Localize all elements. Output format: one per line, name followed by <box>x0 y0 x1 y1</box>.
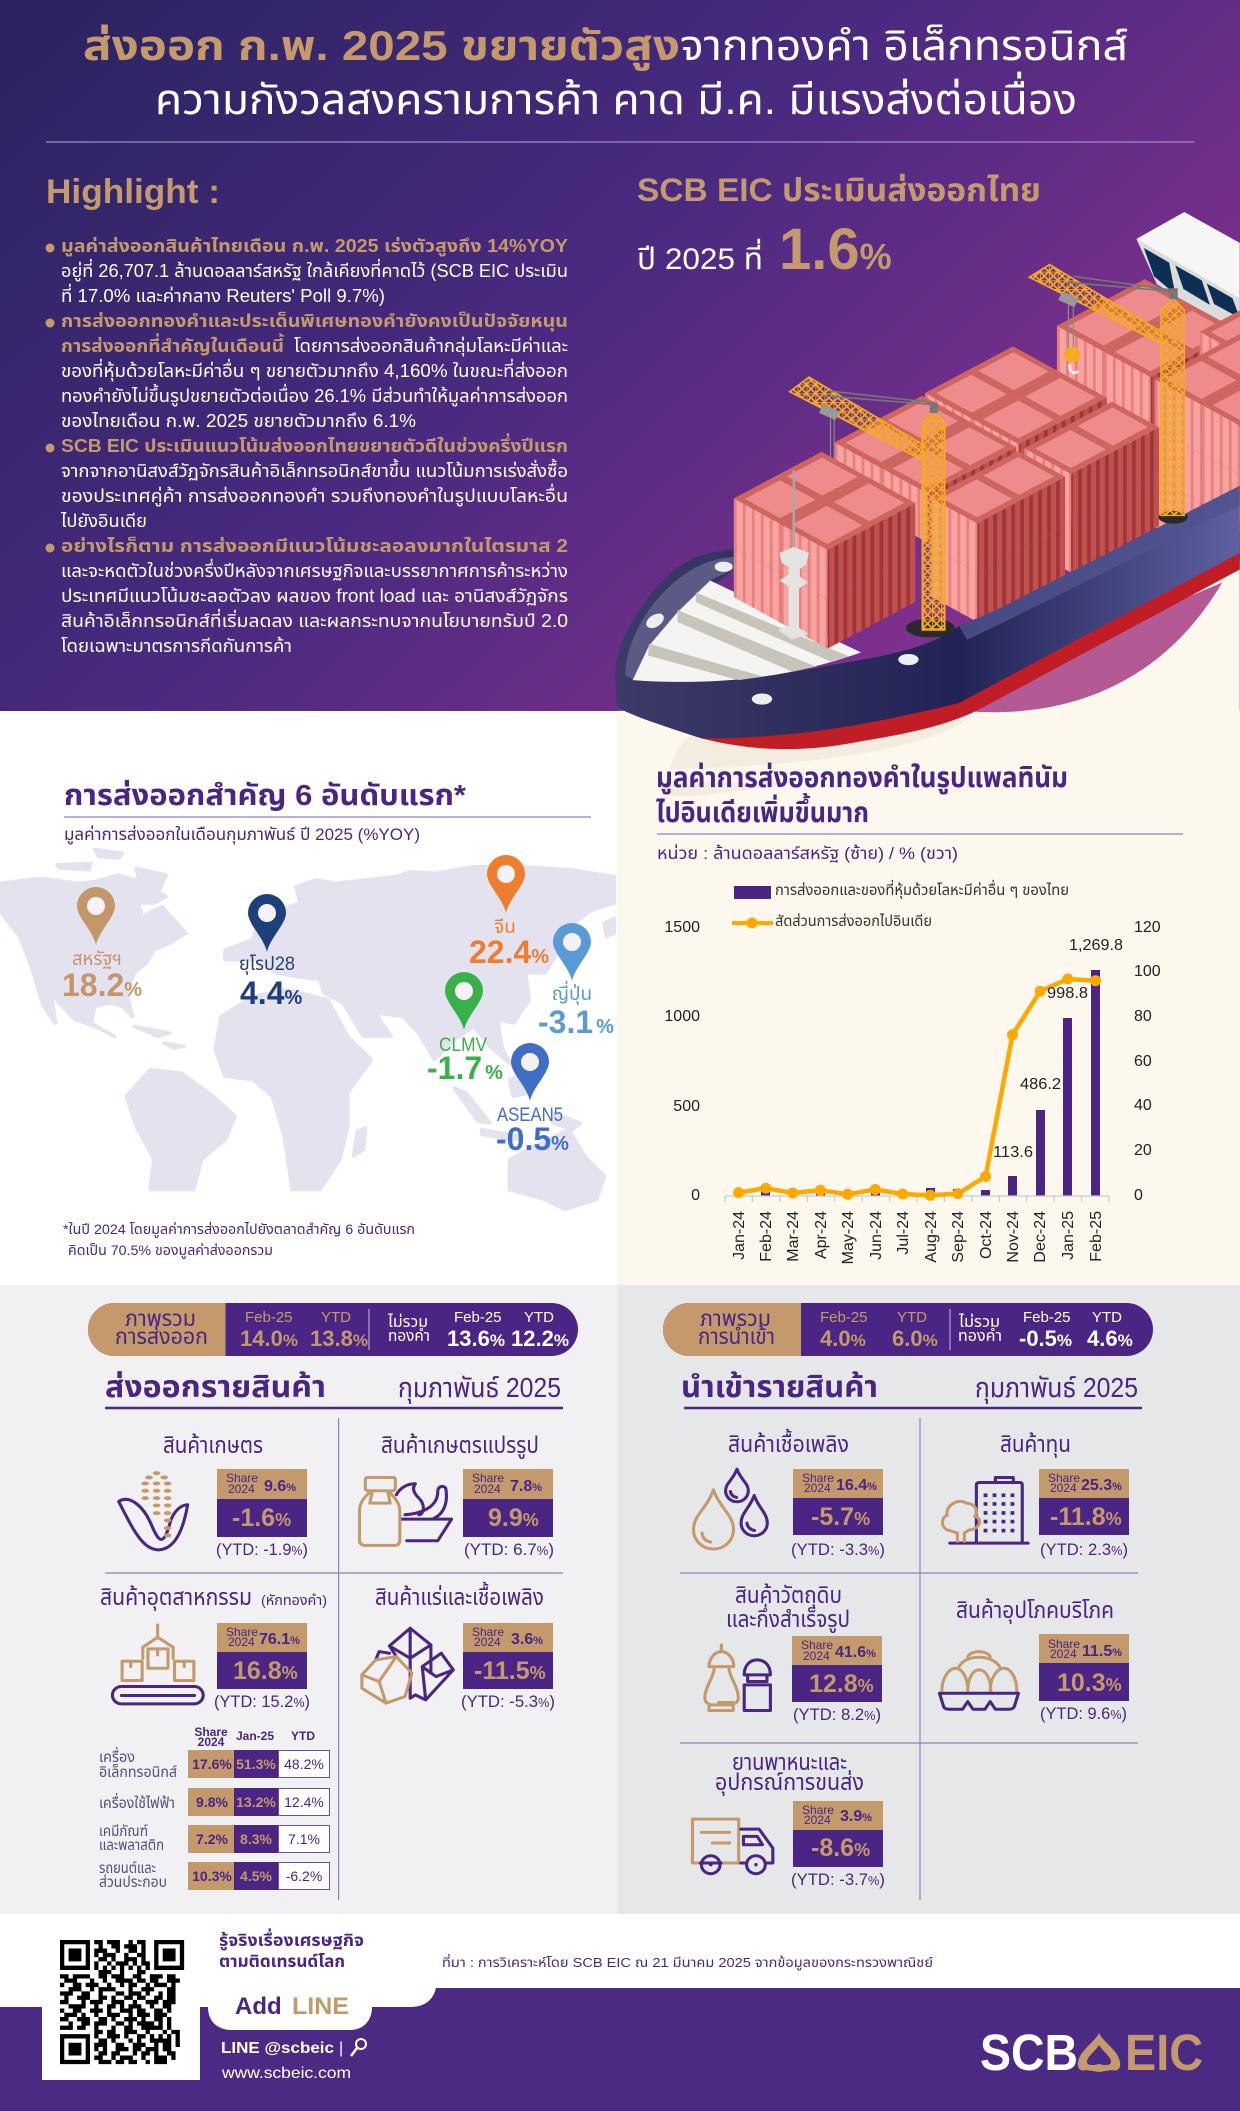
card: raw materials: Share <box>801 1638 833 1652</box>
footer band <box>0 1988 1240 2111</box>
card: vehicles and transport equipment: อุปกรณ์การขนส่ง <box>715 1769 864 1796</box>
x axis labels: Jul-24 <box>895 1211 912 1255</box>
pin: Japan: ญี่ปุ่น <box>552 980 592 1005</box>
chart legend <box>732 879 1069 930</box>
card: processed agricultural goods: 2024 <box>474 1482 501 1496</box>
import summary pill: Feb-25 <box>820 1309 868 1326</box>
export summary pill: YTD <box>524 1309 554 1326</box>
right axis: 0 <box>1134 1187 1143 1204</box>
export summary pill: การส่งออก <box>115 1324 208 1349</box>
import summary pill <box>663 1303 1153 1356</box>
export section heading: กุมภาพันธ์ 2025 <box>398 1372 561 1404</box>
table: industrial breakdown: Jan-25 <box>236 1729 274 1743</box>
table: industrial breakdown: Share <box>194 1725 228 1739</box>
left axis: 500 <box>673 1098 700 1115</box>
footer tagline: ตามติดเทรนด์โลก <box>219 1952 345 1971</box>
pin: CLMV <box>427 972 503 1086</box>
bullet 3: จากจากอานิสงส์วัฏจักรสินค้าอิเล็กทรอนิกส์ขาขึ้น แนวโน้มการเร่งสั่งซื้อ <box>61 458 568 481</box>
bullet 4: ประเทศมีแนวโน้มชะลอตัวลง ผลของ front load และ อานิสงส์วัฏจักร <box>61 586 568 606</box>
card: minerals and fuel: (YTD: -5.3%) <box>461 1692 555 1711</box>
chart heading: ไปอินเดียเพิ่มขึ้นมาก <box>656 792 869 828</box>
bullet 2: ของไทยเดือน ก.พ. 2025 ขยายตัวมากถึง 6.1% <box>61 411 416 431</box>
card: industrial goods: 16.8% <box>233 1657 298 1685</box>
bullet 3 <box>46 433 568 531</box>
export summary pill: 13.6% <box>447 1326 505 1351</box>
card: capital goods: สินค้าทุน <box>1000 1431 1071 1458</box>
map footnote <box>63 1221 415 1259</box>
import summary pill: 4.6% <box>1087 1326 1133 1351</box>
export summary pill: 12.2% <box>511 1326 569 1351</box>
icon: truck <box>692 1819 773 1874</box>
source note: ที่มา : การวิเคราะห์โดย SCB EIC ณ 21 มีนาคม 2025 จากข้อมูลของกระทรวงพาณิชย์ <box>442 1953 933 1970</box>
card: processed agricultural goods: (YTD: 6.7%) <box>464 1540 554 1559</box>
table: industrial breakdown: 13.2% <box>236 1794 276 1810</box>
card: vehicles and transport equipment <box>692 1749 885 1889</box>
icon: corn <box>119 1471 188 1550</box>
import summary pill: การนำเข้า <box>698 1324 775 1349</box>
export summary pill: ไม่รวม <box>387 1313 428 1331</box>
bullet 2: การส่งออกที่สำคัญในเดือนนี้ <box>61 333 285 356</box>
forecast callout: 1.6% <box>779 217 892 282</box>
card: capital goods <box>942 1431 1129 1559</box>
card: vehicles and transport equipment: 3.9% <box>840 1808 872 1825</box>
left axis: 1500 <box>664 919 700 936</box>
card: raw materials: 12.8% <box>809 1670 874 1698</box>
import summary pill: ไม่รวม <box>958 1313 1000 1331</box>
card: vehicles and transport equipment: 2024 <box>804 1813 831 1827</box>
contact links: LINE @scbeic <box>221 2040 334 2057</box>
pin: Europe: ยุโรป28 <box>239 954 295 975</box>
chart heading <box>656 762 1183 863</box>
export summary pill: Feb-25 <box>245 1309 293 1326</box>
bullet 2: ของที่หุ้มด้วยโลหะมีค่าอื่น ๆ ขยายตัวมากถึง 4,160% ในขณะที่ส่งออก <box>61 358 568 382</box>
table: industrial breakdown: YTD <box>291 1729 315 1743</box>
card: vehicles and transport equipment: -8.6% <box>811 1834 870 1862</box>
right axis <box>1134 919 1161 1204</box>
bullet 4 <box>46 536 568 656</box>
card: raw materials: (YTD: 8.2%) <box>793 1705 881 1724</box>
bullet 1: ที่ 17.0% และค่ากลาง Reuters' Poll 9.7%) <box>61 283 385 306</box>
add line button: LINE <box>292 1993 349 2020</box>
import summary pill: 6.0% <box>892 1326 938 1351</box>
bullet 3: ของประเทศคู่ค้า การส่งออกทองคำ รวมถึงทองคำในรูปแบบโลหะอื่น <box>61 483 568 508</box>
card: industrial goods: 2024 <box>228 1635 255 1649</box>
import summary pill: -0.5% <box>1019 1326 1072 1351</box>
forecast callout: ปี 2025 ที่ <box>637 238 763 276</box>
table: industrial breakdown: เครื่อง <box>99 1746 135 1766</box>
card: industrial goods: Share <box>226 1625 258 1639</box>
chart heading: มูลค่าการส่งออกทองคำในรูปแพลทินัม <box>656 762 1068 795</box>
x axis labels: May-24 <box>840 1211 857 1264</box>
card: minerals and fuel: Share <box>472 1625 504 1639</box>
table: industrial breakdown <box>99 1725 330 1891</box>
x axis labels <box>731 1211 1105 1264</box>
card: raw materials: 2024 <box>803 1649 830 1663</box>
export summary pill: ทองคำ <box>388 1328 430 1345</box>
card: consumer goods: 10.3% <box>1057 1669 1122 1697</box>
export summary pill: YTD <box>321 1309 351 1326</box>
card: fuel: Share <box>802 1471 834 1485</box>
contact links <box>221 2039 366 2082</box>
title <box>83 22 1128 123</box>
section backgrounds <box>0 711 1240 2111</box>
map heading: มูลค่าการส่งออกในเดือนกุมภาพันธ์ ปี 2025 (%YOY) <box>64 825 420 846</box>
table: industrial breakdown: 9.8% <box>196 1794 229 1810</box>
bar value labels <box>993 937 1123 1161</box>
card: agricultural goods: 9.6% <box>264 1478 296 1495</box>
import summary pill: ภาพรวม <box>700 1306 771 1331</box>
card: industrial goods: (YTD: 15.2%) <box>214 1692 310 1711</box>
card: industrial goods: สินค้าอุตสาหกรรม <box>100 1584 252 1611</box>
highlight panel <box>46 173 568 656</box>
card: minerals and fuel: สินค้าแร่และเชื้อเพลิง <box>375 1581 544 1610</box>
card: fuel <box>693 1428 885 1559</box>
pin: China <box>469 855 549 970</box>
table: industrial breakdown: 51.3% <box>236 1756 276 1772</box>
export summary pill: 13.8% <box>310 1326 368 1351</box>
map footnote: คิดเป็น 70.5% ของมูลค่าส่งออกรวม <box>68 1242 273 1259</box>
card: industrial goods <box>99 1584 330 1891</box>
export summary pill: Feb-25 <box>454 1309 502 1326</box>
title: ส่งออก ก.พ. 2025 ขยายตัวสูง <box>83 22 680 71</box>
card: agricultural goods <box>119 1432 308 1559</box>
bullet 4: อย่างไรก็ตาม การส่งออกมีแนวโน้มชะลอลงมากในไตรมาส 2 <box>61 536 568 556</box>
bar value labels: 486.2 <box>1020 1076 1061 1093</box>
icon: building and tree <box>942 1477 1028 1543</box>
table: industrial breakdown: และพลาสติก <box>99 1837 164 1854</box>
x axis labels: Oct-24 <box>978 1211 995 1259</box>
card: consumer goods: 2024 <box>1050 1647 1077 1661</box>
card: processed agricultural goods <box>359 1432 554 1559</box>
card: capital goods: -11.8% <box>1050 1503 1122 1531</box>
pin: USA: 18.2% <box>62 967 142 1003</box>
import summary pill: YTD <box>1092 1309 1122 1326</box>
card: raw materials: 41.6% <box>835 1644 876 1661</box>
table: industrial breakdown: เคมีภัณฑ์ <box>99 1823 148 1840</box>
icon: crystals <box>362 1628 453 1703</box>
pin: Europe <box>239 894 302 1011</box>
table: industrial breakdown: 2024 <box>198 1735 225 1749</box>
export summary pill: 14.0% <box>240 1326 298 1351</box>
logo: SCB EIC: EIC <box>1125 2024 1203 2081</box>
bullet 1: อยู่ที่ 26,707.1 ล้านดอลลาร์สหรัฐ ใกล้เคียงที่คาดไว้ (SCB EIC ประเมิน <box>61 258 568 283</box>
pin: USA <box>62 887 142 1003</box>
bullet 1 <box>46 236 568 306</box>
card: capital goods: 25.3% <box>1081 1477 1122 1494</box>
export section heading: ส่งออกรายสินค้า <box>105 1371 326 1404</box>
pin: China: 22.4% <box>469 934 549 970</box>
card: agricultural goods: -1.6% <box>232 1504 291 1532</box>
card: minerals and fuel: 2024 <box>474 1635 501 1649</box>
table: industrial breakdown: 4.5% <box>240 1868 273 1884</box>
card: minerals and fuel <box>362 1581 555 1711</box>
bullet 4: และจะหดตัวในช่วงครึ่งปีหลังจากเศรษฐกิจและบรรยากาศการค้าระหว่าง <box>61 558 568 581</box>
contact links: | <box>339 2040 343 2057</box>
logo: SCB EIC: SCB <box>980 2024 1078 2081</box>
x axis labels: Mar-24 <box>785 1211 802 1262</box>
card: processed agricultural goods: 9.9% <box>488 1504 539 1532</box>
card: capital goods: 2024 <box>1050 1481 1077 1495</box>
export summary pill: ภาพรวม <box>125 1306 196 1331</box>
left axis <box>664 919 700 1204</box>
table: industrial breakdown: 8.3% <box>240 1831 273 1847</box>
bullet 2: โดยการส่งออกสินค้ากลุ่มโลหะมีค่าและ <box>294 336 568 357</box>
x axis labels: Feb-25 <box>1088 1211 1105 1262</box>
card: processed agricultural goods: 7.8% <box>510 1478 542 1495</box>
map heading <box>64 780 591 846</box>
card: minerals and fuel: -11.5% <box>474 1657 546 1685</box>
x axis labels: Jan-24 <box>731 1211 748 1260</box>
import summary pill: Feb-25 <box>1023 1309 1071 1326</box>
import section heading <box>681 1371 1142 1408</box>
contact links: www.scbeic.com <box>221 2065 351 2082</box>
footer tagline: รู้จริงเรื่องเศรษฐกิจ <box>219 1928 364 1951</box>
card: raw materials: สินค้าวัตถุดิบ <box>735 1582 842 1609</box>
bullet 1: มูลค่าส่งออกสินค้าไทยเดือน ก.พ. 2025 เร่งตัวสูงถึง 14%YOY <box>61 236 568 257</box>
forecast callout <box>637 172 1041 282</box>
footer tagline <box>219 1928 364 1971</box>
card: consumer goods: Share <box>1048 1637 1080 1651</box>
pin: CLMV: -1.7% <box>427 1050 503 1086</box>
table: industrial breakdown: 12.4% <box>284 1794 324 1810</box>
table: industrial breakdown: 17.6% <box>192 1756 232 1772</box>
pin: ASEAN5 <box>496 1043 569 1157</box>
add line button: Add <box>235 1993 282 2020</box>
bullet 2 <box>46 311 568 431</box>
icon: bottle and fruit bowl <box>359 1477 452 1545</box>
card: consumer goods: 11.5% <box>1082 1643 1122 1660</box>
table: industrial breakdown: รถยนต์และ <box>99 1860 156 1877</box>
x axis labels: Dec-24 <box>1032 1211 1049 1263</box>
table: industrial breakdown: -6.2% <box>286 1868 322 1884</box>
bullet 3: SCB EIC ประเมินแนวโน้มส่งออกไทยขยายตัวดีในช่วงครึ่งปีแรก <box>61 433 568 456</box>
bar value labels: 1,269.8 <box>1069 937 1123 954</box>
import summary pill: ทองคำ <box>958 1328 1002 1345</box>
chart legend: สัดส่วนการส่งออกไปอินเดีย <box>775 912 932 930</box>
bullet 2: การส่งออกทองคำและประเด็นพิเศษทองคำยังคงเป็นปัจจัยหนุน <box>61 311 568 332</box>
x axis labels: Jan-25 <box>1060 1211 1077 1260</box>
card: processed agricultural goods: สินค้าเกษตรแปรรูป <box>381 1432 539 1460</box>
pin: Japan <box>538 923 614 1040</box>
right axis: 120 <box>1134 919 1161 936</box>
export summary pill <box>88 1303 578 1356</box>
card: industrial goods: 76.1% <box>259 1631 300 1648</box>
chart: gold exports to India <box>664 879 1161 1264</box>
right axis: 40 <box>1134 1097 1152 1114</box>
highlight heading: Highlight : <box>46 173 220 211</box>
x axis labels: Feb-24 <box>758 1211 775 1262</box>
right axis: 100 <box>1134 963 1161 980</box>
icon: egg tray <box>939 1652 1018 1709</box>
card: vehicles and transport equipment: ยานพาหนะและ <box>732 1749 847 1775</box>
card: minerals and fuel: 3.6% <box>511 1631 543 1648</box>
left axis: 0 <box>691 1187 700 1204</box>
x axis labels: Sep-24 <box>950 1211 967 1263</box>
table: industrial breakdown: 7.1% <box>288 1831 320 1847</box>
import summary pill: 4.0% <box>820 1326 866 1351</box>
pin: CLMV: CLMV <box>439 1035 487 1056</box>
card: fuel: สินค้าเชื้อเพลิง <box>728 1428 849 1457</box>
table: industrial breakdown: 48.2% <box>284 1756 324 1772</box>
bars <box>761 970 1100 1196</box>
x axis labels: Jun-24 <box>868 1211 885 1260</box>
x axis labels: Nov-24 <box>1005 1211 1022 1263</box>
title: ความกังวลสงครามการค้า คาด มี.ค. มีแรงส่งต่อเนื่อง <box>155 71 1077 123</box>
right axis: 60 <box>1134 1053 1152 1070</box>
bar value labels: 113.6 <box>993 1144 1033 1161</box>
card: raw materials: และกึ่งสำเร็จรูป <box>726 1603 850 1634</box>
right axis: 20 <box>1134 1142 1152 1159</box>
pin: Japan: -3.1% <box>538 1004 614 1040</box>
import section heading: นำเข้ารายสินค้า <box>681 1371 878 1404</box>
card: raw materials <box>705 1582 882 1724</box>
card: agricultural goods: Share <box>226 1471 258 1485</box>
card: fuel: (YTD: -3.3%) <box>791 1540 885 1559</box>
pin: China: จีน <box>494 917 516 938</box>
logo: SCB EIC <box>980 2024 1203 2081</box>
card: vehicles and transport equipment: (YTD: -3.7%) <box>791 1870 885 1889</box>
world map <box>0 849 614 1210</box>
bullet 4: สินค้าอิเล็กทรอนิกส์ที่เริ่มลดลง และผลกระทบจากนโยบายทรัมป์ 2.0 <box>61 608 568 631</box>
left axis: 1000 <box>664 1008 700 1025</box>
right axis: 80 <box>1134 1008 1152 1025</box>
bullet 2: ทองคำยังไม่ขึ้นรูปขยายตัวต่อเนื่อง 26.1% มีส่วนทำให้มูลค่าการส่งออก <box>61 383 568 408</box>
export section heading <box>105 1371 563 1408</box>
card: consumer goods: สินค้าอุปโภคบริโภค <box>956 1597 1114 1624</box>
card: fuel: 2024 <box>804 1481 831 1495</box>
chart heading: หน่วย : ล้านดอลลาร์สหรัฐ (ซ้าย) / % (ขวา) <box>657 843 958 863</box>
card: industrial goods: (หักทองคำ) <box>261 1592 327 1608</box>
QR code <box>60 1940 184 2064</box>
header background <box>0 0 1240 712</box>
icon: conveyor and boxes <box>112 1625 203 1704</box>
table: industrial breakdown: เครื่องใช้ไฟฟ้า <box>99 1792 175 1812</box>
import section heading: กุมภาพันธ์ 2025 <box>975 1372 1138 1404</box>
title: จากทองคำ อิเล็กทรอนิกส์ <box>680 22 1128 69</box>
pin: ASEAN5: -0.5% <box>496 1121 569 1157</box>
line series <box>733 974 1101 1201</box>
card: fuel: -5.7% <box>811 1503 870 1531</box>
card: processed agricultural goods: Share <box>472 1471 504 1485</box>
icon: shakers <box>705 1645 770 1711</box>
illustration: container ship <box>616 212 1240 782</box>
card: agricultural goods: สินค้าเกษตร <box>163 1432 263 1458</box>
card: capital goods: Share <box>1048 1471 1080 1485</box>
map heading: การส่งออกสำคัญ 6 อันดับแรก* <box>64 780 467 812</box>
card: agricultural goods: 2024 <box>228 1482 255 1496</box>
card: agricultural goods: (YTD: -1.9%) <box>216 1540 308 1559</box>
pin: USA: สหรัฐฯ <box>72 949 122 970</box>
add line button <box>235 1993 349 2020</box>
card: consumer goods: (YTD: 9.6%) <box>1040 1704 1127 1723</box>
card: vehicles and transport equipment: Share <box>802 1803 834 1817</box>
card: fuel: 16.4% <box>836 1477 877 1494</box>
table: industrial breakdown: อิเล็กทรอนิกส์ <box>99 1763 177 1781</box>
forecast callout: SCB EIC ประเมินส่งออกไทย <box>637 172 1041 208</box>
table: industrial breakdown: ส่วนประกอบ <box>99 1873 167 1891</box>
pin: ASEAN5: ASEAN5 <box>497 1105 563 1126</box>
bullet 3: ไปยังอินเดีย <box>60 511 147 531</box>
card: capital goods: (YTD: 2.3%) <box>1040 1540 1128 1559</box>
bullet 4: โดยเฉพาะมาตรการกีดกันการค้า <box>61 636 292 656</box>
card: consumer goods <box>939 1597 1129 1723</box>
bar value labels: 998.8 <box>1047 985 1088 1002</box>
chart legend: การส่งออกและของที่หุ้มด้วยโลหะมีค่าอื่น ๆ ของไทย <box>775 879 1069 899</box>
x axis labels: Apr-24 <box>813 1211 830 1259</box>
table: industrial breakdown: 7.2% <box>196 1831 229 1847</box>
pin: Europe: 4.4% <box>240 975 302 1011</box>
map footnote: *ในปี 2024 โดยมูลค่าการส่งออกไปยังตลาดสำคัญ 6 อันดับแรก <box>63 1221 415 1238</box>
import summary pill: YTD <box>897 1309 927 1326</box>
table: industrial breakdown: 10.3% <box>192 1868 232 1884</box>
icon: drops <box>693 1469 767 1549</box>
x axis labels: Aug-24 <box>923 1211 940 1263</box>
